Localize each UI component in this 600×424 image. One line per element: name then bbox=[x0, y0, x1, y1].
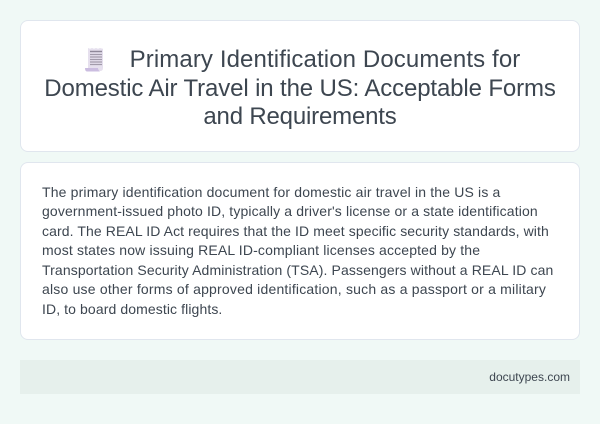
title heading: and Requirements bbox=[203, 103, 397, 130]
body text: card. The REAL ID Act requires that the ID meet specific security standards, with bbox=[42, 223, 549, 239]
body text: The primary identification document for domestic air travel in the US is a bbox=[42, 184, 500, 200]
footer source text: docutypes.com bbox=[489, 370, 570, 384]
footer bar bbox=[20, 360, 580, 394]
panel: description card bbox=[20, 162, 580, 340]
body text: government-issued photo ID, typically a driver's license or a state identification bbox=[42, 203, 538, 219]
title heading: Primary Identification Documents for bbox=[130, 46, 520, 73]
panel: title card bbox=[20, 20, 580, 152]
body text: ID, to board domestic flights. bbox=[42, 301, 222, 317]
body text: Transportation Security Administration (TSA). Passengers without a REAL ID can bbox=[42, 262, 553, 278]
body text bbox=[42, 184, 553, 317]
icon: document scroll bbox=[85, 48, 103, 72]
title heading bbox=[44, 46, 556, 130]
title heading: Domestic Air Travel in the US: Acceptable Forms bbox=[44, 75, 556, 102]
body text: most states now issuing REAL ID-compliant licenses accepted by the bbox=[42, 242, 480, 258]
body text: also use other forms of approved identification, such as a passport or a military bbox=[42, 281, 546, 297]
